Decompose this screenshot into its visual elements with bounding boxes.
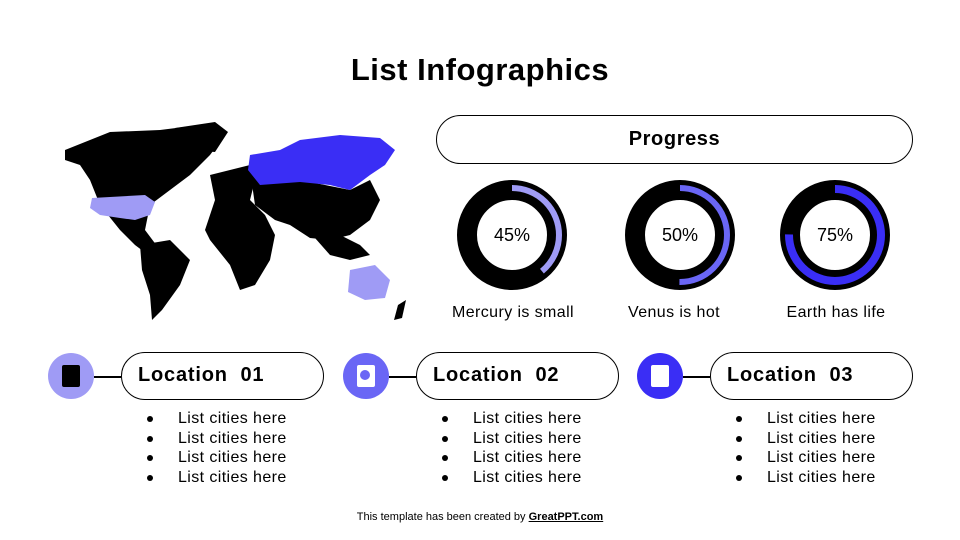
label earth: Earth has life bbox=[786, 304, 885, 321]
title: List Infographics bbox=[351, 52, 609, 87]
list 3: List cities here bbox=[767, 449, 876, 466]
donut 45% bbox=[465, 188, 559, 282]
location 02 bbox=[343, 352, 619, 486]
donut 50% bbox=[633, 188, 727, 282]
list 2 bbox=[442, 410, 582, 486]
list 2: List cities here bbox=[473, 410, 582, 427]
asia bbox=[248, 135, 395, 240]
donut 75%: 75% bbox=[817, 225, 853, 245]
location 01 bbox=[48, 352, 324, 486]
SE asia bbox=[315, 235, 370, 260]
list 1 bbox=[147, 410, 287, 486]
icon 1 bbox=[48, 353, 94, 399]
donut 45%: 45% bbox=[494, 225, 530, 245]
pill 3: Location 03 bbox=[727, 364, 853, 386]
list 3 bbox=[736, 410, 876, 486]
pill 3 bbox=[710, 352, 913, 400]
location 03 bbox=[637, 352, 913, 486]
label venus: Venus is hot bbox=[628, 304, 720, 321]
list 3: List cities here bbox=[767, 430, 876, 446]
europe/africa bbox=[205, 165, 275, 290]
progress header bbox=[436, 115, 913, 164]
list 3: List cities here bbox=[767, 468, 876, 486]
list 3: List cities here bbox=[767, 410, 876, 427]
list 2: List cities here bbox=[473, 430, 582, 446]
icon 3 bbox=[637, 353, 683, 399]
pill 1 bbox=[121, 352, 324, 400]
donut 75% bbox=[789, 189, 881, 281]
north america bbox=[65, 125, 225, 260]
list 1: List cities here bbox=[178, 468, 287, 486]
australia bbox=[348, 265, 390, 300]
list 1: List cities here bbox=[178, 410, 287, 427]
donut 50%: 50% bbox=[662, 225, 698, 245]
pill 2: Location 02 bbox=[433, 364, 559, 386]
list 1: List cities here bbox=[178, 430, 287, 446]
donut charts bbox=[457, 180, 890, 290]
label mercury: Mercury is small bbox=[452, 304, 574, 321]
pill 1: Location 01 bbox=[138, 364, 264, 386]
world map bbox=[65, 122, 406, 320]
greenland bbox=[175, 122, 228, 152]
icon 2 bbox=[343, 353, 389, 399]
progress header: Progress bbox=[629, 128, 720, 150]
pill 2 bbox=[416, 352, 619, 400]
footer: This template has been created by GreatPPT.com bbox=[357, 511, 603, 523]
list 1: List cities here bbox=[178, 449, 287, 466]
south america bbox=[140, 240, 190, 320]
list 2: List cities here bbox=[473, 449, 582, 466]
list 2: List cities here bbox=[473, 468, 582, 486]
